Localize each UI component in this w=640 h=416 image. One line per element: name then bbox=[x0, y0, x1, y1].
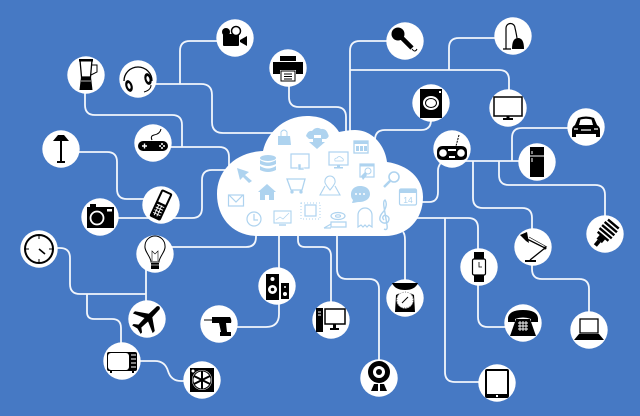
icon: film reel bbox=[324, 212, 346, 228]
device: car bbox=[567, 108, 605, 146]
device: laptop bbox=[570, 311, 608, 349]
cloud bbox=[217, 116, 423, 236]
icon: house bbox=[258, 184, 276, 200]
device: flat monitor bbox=[489, 89, 527, 127]
icon: wall clock bbox=[247, 212, 261, 226]
device: wall clock bbox=[20, 230, 58, 268]
icon: touch tablet bbox=[291, 154, 309, 170]
device: compact fluorescent bulb bbox=[586, 215, 624, 253]
device: kitchen scale bbox=[386, 279, 424, 317]
icon: database bbox=[260, 155, 276, 172]
device: light bulb bbox=[136, 235, 174, 273]
device: game controller bbox=[134, 124, 172, 162]
icon: cursor arrow bbox=[237, 168, 252, 183]
device: printer bbox=[269, 49, 307, 87]
device: blender bbox=[67, 56, 105, 94]
device: airplane bbox=[126, 297, 169, 340]
device: smart watch bbox=[460, 248, 498, 286]
icon: map pin bbox=[320, 176, 340, 195]
device: power drill bbox=[200, 305, 238, 343]
device: boombox radio bbox=[433, 130, 471, 168]
device: webcam bbox=[360, 359, 398, 397]
device: headset bbox=[119, 60, 157, 98]
device: refrigerator bbox=[518, 143, 556, 181]
icon: chart monitor bbox=[274, 211, 291, 225]
device: rotary telephone bbox=[504, 304, 542, 342]
device: photo camera bbox=[81, 198, 119, 236]
device: mobile phone bbox=[142, 186, 180, 224]
icon: touch window bbox=[360, 164, 374, 180]
device: video camera bbox=[216, 19, 254, 57]
icon: treble clef bbox=[380, 200, 389, 230]
device: retro television bbox=[103, 342, 141, 380]
device: fan unit bbox=[183, 361, 221, 399]
device: vacuum cleaner bbox=[494, 17, 532, 55]
device: microphone bbox=[386, 22, 424, 60]
device: tablet bbox=[478, 364, 516, 402]
icon: cloud monitor bbox=[329, 152, 348, 168]
icon: calendar window bbox=[354, 141, 368, 153]
device: washing machine bbox=[412, 84, 450, 122]
device: speakers bbox=[258, 267, 296, 305]
icon: ghost bbox=[358, 208, 372, 227]
icon: envelope bbox=[228, 195, 244, 206]
icon: calendar 14 bbox=[400, 189, 416, 205]
device: desktop computer bbox=[312, 301, 350, 339]
icon: calendar 14: 14 bbox=[403, 195, 413, 205]
icon: shopping cart bbox=[287, 179, 305, 193]
icon: chat bubble bbox=[351, 186, 370, 203]
icon: cloud download bbox=[306, 128, 329, 149]
icon: shopping bag bbox=[278, 130, 291, 145]
device: floor lamp bbox=[42, 130, 80, 168]
device: desk lamp bbox=[514, 228, 552, 266]
icon: magnifier bbox=[384, 172, 399, 187]
icon: microchip bbox=[301, 203, 320, 219]
